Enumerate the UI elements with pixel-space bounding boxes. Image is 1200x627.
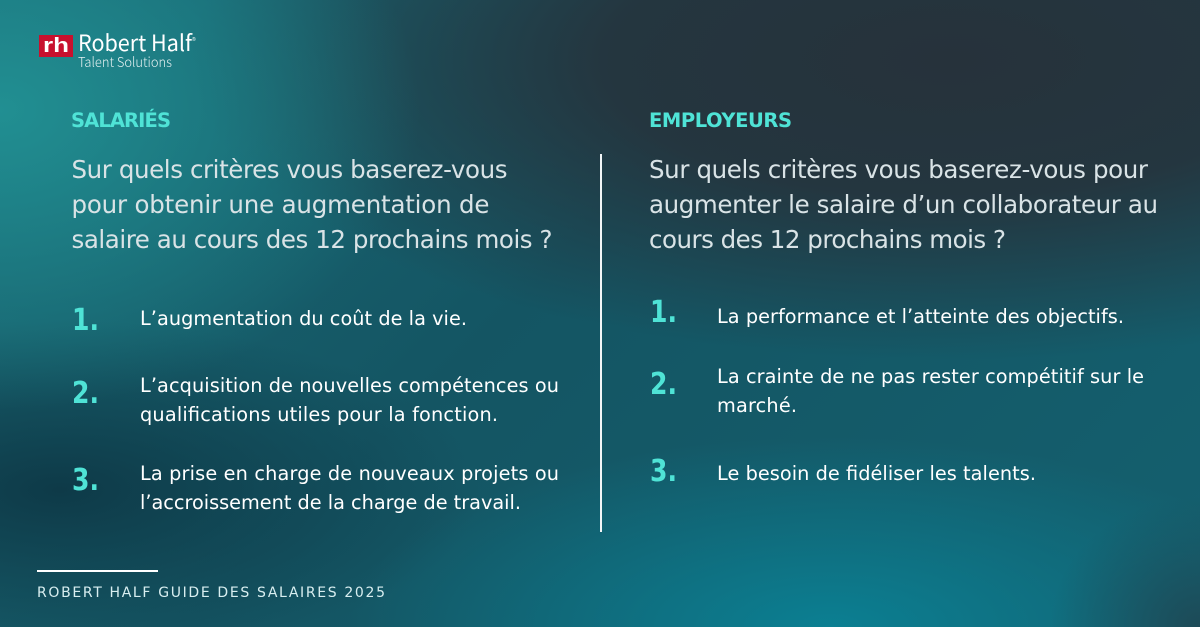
item 1: L’augmentation du coût de la vie. xyxy=(140,307,467,330)
item 2 xyxy=(72,374,559,426)
item 3 xyxy=(650,454,1036,489)
question: salariés: pour obtenir une augmentation de xyxy=(72,190,490,219)
item 3: 3. xyxy=(72,463,99,498)
item 1 xyxy=(650,295,1124,330)
list: employeurs criteria xyxy=(650,295,1144,489)
item 2: qualifications utiles pour la fonction. xyxy=(140,403,498,426)
item 1: La performance et l’atteinte des objectifs. xyxy=(717,305,1124,328)
item 1 xyxy=(72,303,467,338)
item 1: 1. xyxy=(650,295,677,330)
item 3: l’accroissement de la charge de travail. xyxy=(140,491,521,514)
logo: Robert Half Talent Solutions xyxy=(39,26,196,71)
item 2: L’acquisition de nouvelles compétences ou xyxy=(140,374,559,397)
item 3: La prise en charge de nouveaux projets ou xyxy=(140,462,559,485)
logo: Robert Half Talent Solutions: rh xyxy=(43,35,69,57)
item 2: 2. xyxy=(650,367,677,402)
item 3: 3. xyxy=(650,454,677,489)
question: employeurs: cours des 12 prochains mois ? xyxy=(649,225,1006,254)
question: employeurs xyxy=(649,155,1158,254)
item 3 xyxy=(72,462,559,514)
heading: employeurs: EMPLOYEURS xyxy=(649,109,792,132)
item 2 xyxy=(650,365,1144,417)
question: salariés: salaire au cours des 12 prochains mois ? xyxy=(72,225,552,254)
question: employeurs: Sur quels critères vous baserez-vous pour xyxy=(649,155,1149,184)
logo: Robert Half Talent Solutions: Robert Half xyxy=(78,26,193,58)
question: salariés xyxy=(72,155,552,254)
logo: Robert Half Talent Solutions: Talent Solutions xyxy=(78,51,172,71)
list: salariés criteria xyxy=(72,303,559,514)
item 3: Le besoin de fidéliser les talents. xyxy=(717,462,1036,485)
item 2: marché. xyxy=(717,394,797,417)
item 2: 2. xyxy=(72,376,99,411)
item 2: La crainte de ne pas rester compétitif sur le xyxy=(717,365,1144,388)
question: employeurs: augmenter le salaire d’un collaborateur au xyxy=(649,190,1158,219)
item 1: 1. xyxy=(72,303,99,338)
question: salariés: Sur quels critères vous baserez-vous xyxy=(72,155,508,184)
footer source: ROBERT HALF GUIDE DES SALAIRES 2025 xyxy=(37,585,385,601)
footer rule xyxy=(37,570,158,572)
column divider xyxy=(600,154,602,532)
heading: salariés: SALARIÉS xyxy=(71,109,171,132)
logo: Robert Half Talent Solutions: ® xyxy=(192,36,196,43)
